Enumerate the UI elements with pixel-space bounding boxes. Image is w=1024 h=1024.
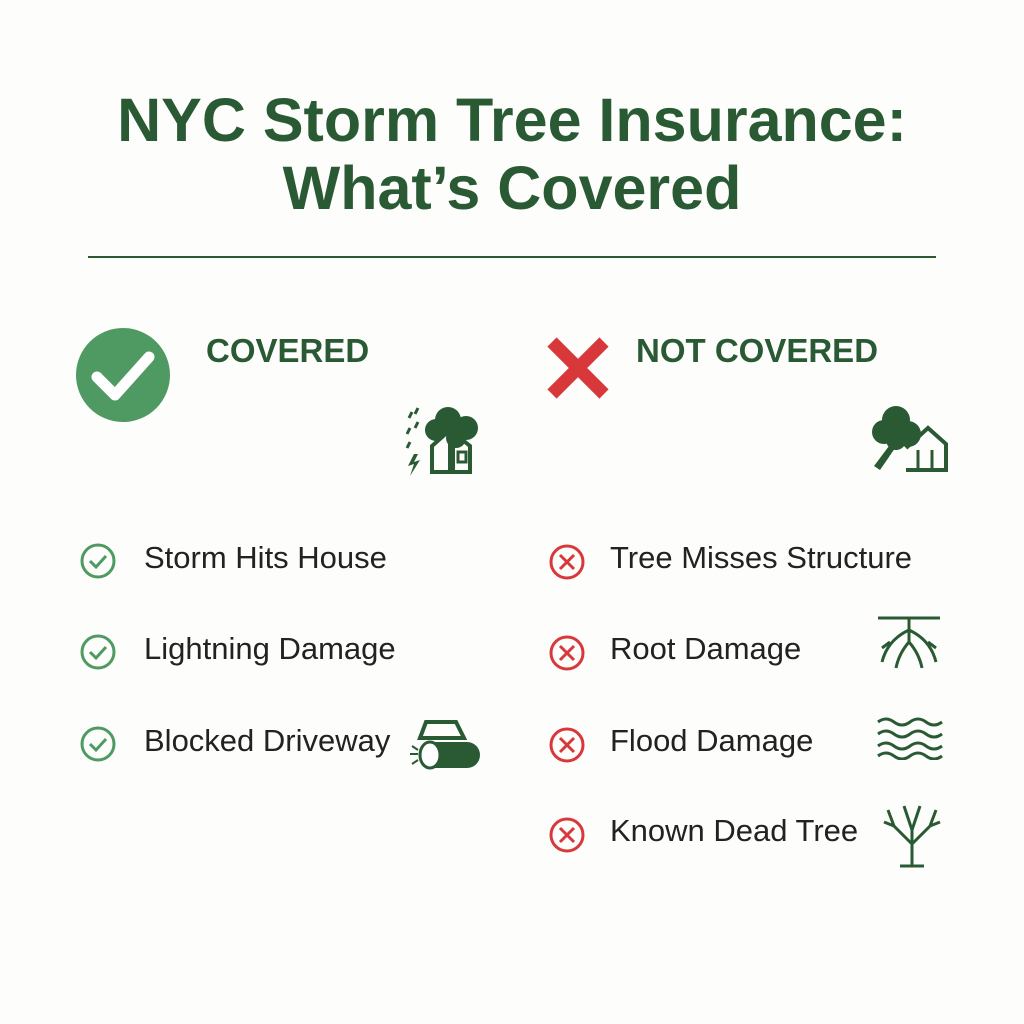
- icon: roots: [878, 616, 940, 668]
- icon: dead tree: [884, 806, 940, 868]
- item: root damage: Root Damage: [610, 631, 801, 666]
- heading: covered: COVERED: [206, 332, 369, 369]
- icon: car and log: [410, 720, 480, 770]
- title: What’s Covered: [283, 154, 741, 222]
- item: blocked driveway: Blocked Driveway: [144, 723, 390, 758]
- title: NYC Storm Tree Insurance:: [117, 86, 907, 154]
- icon: waves: [877, 718, 943, 760]
- icon: tree on house: [872, 406, 948, 472]
- title: [117, 86, 907, 222]
- icon: red x: [548, 337, 608, 399]
- panel: covered: [76, 328, 480, 770]
- item: known dead tree: Known Dead Tree: [610, 813, 858, 848]
- item: storm hits house: Storm Hits House: [144, 540, 387, 575]
- icon: green check circle: [76, 328, 170, 422]
- item: root damage: [550, 631, 801, 670]
- panel: not covered: [548, 332, 948, 868]
- item: tree misses structure: Tree Misses Structure: [610, 540, 912, 575]
- heading: not covered: NOT COVERED: [636, 332, 878, 369]
- item: flood damage: [550, 723, 813, 762]
- item: flood damage: Flood Damage: [610, 723, 813, 758]
- icon: storm tree house: [406, 407, 478, 476]
- item: lightning damage: Lightning Damage: [144, 631, 396, 666]
